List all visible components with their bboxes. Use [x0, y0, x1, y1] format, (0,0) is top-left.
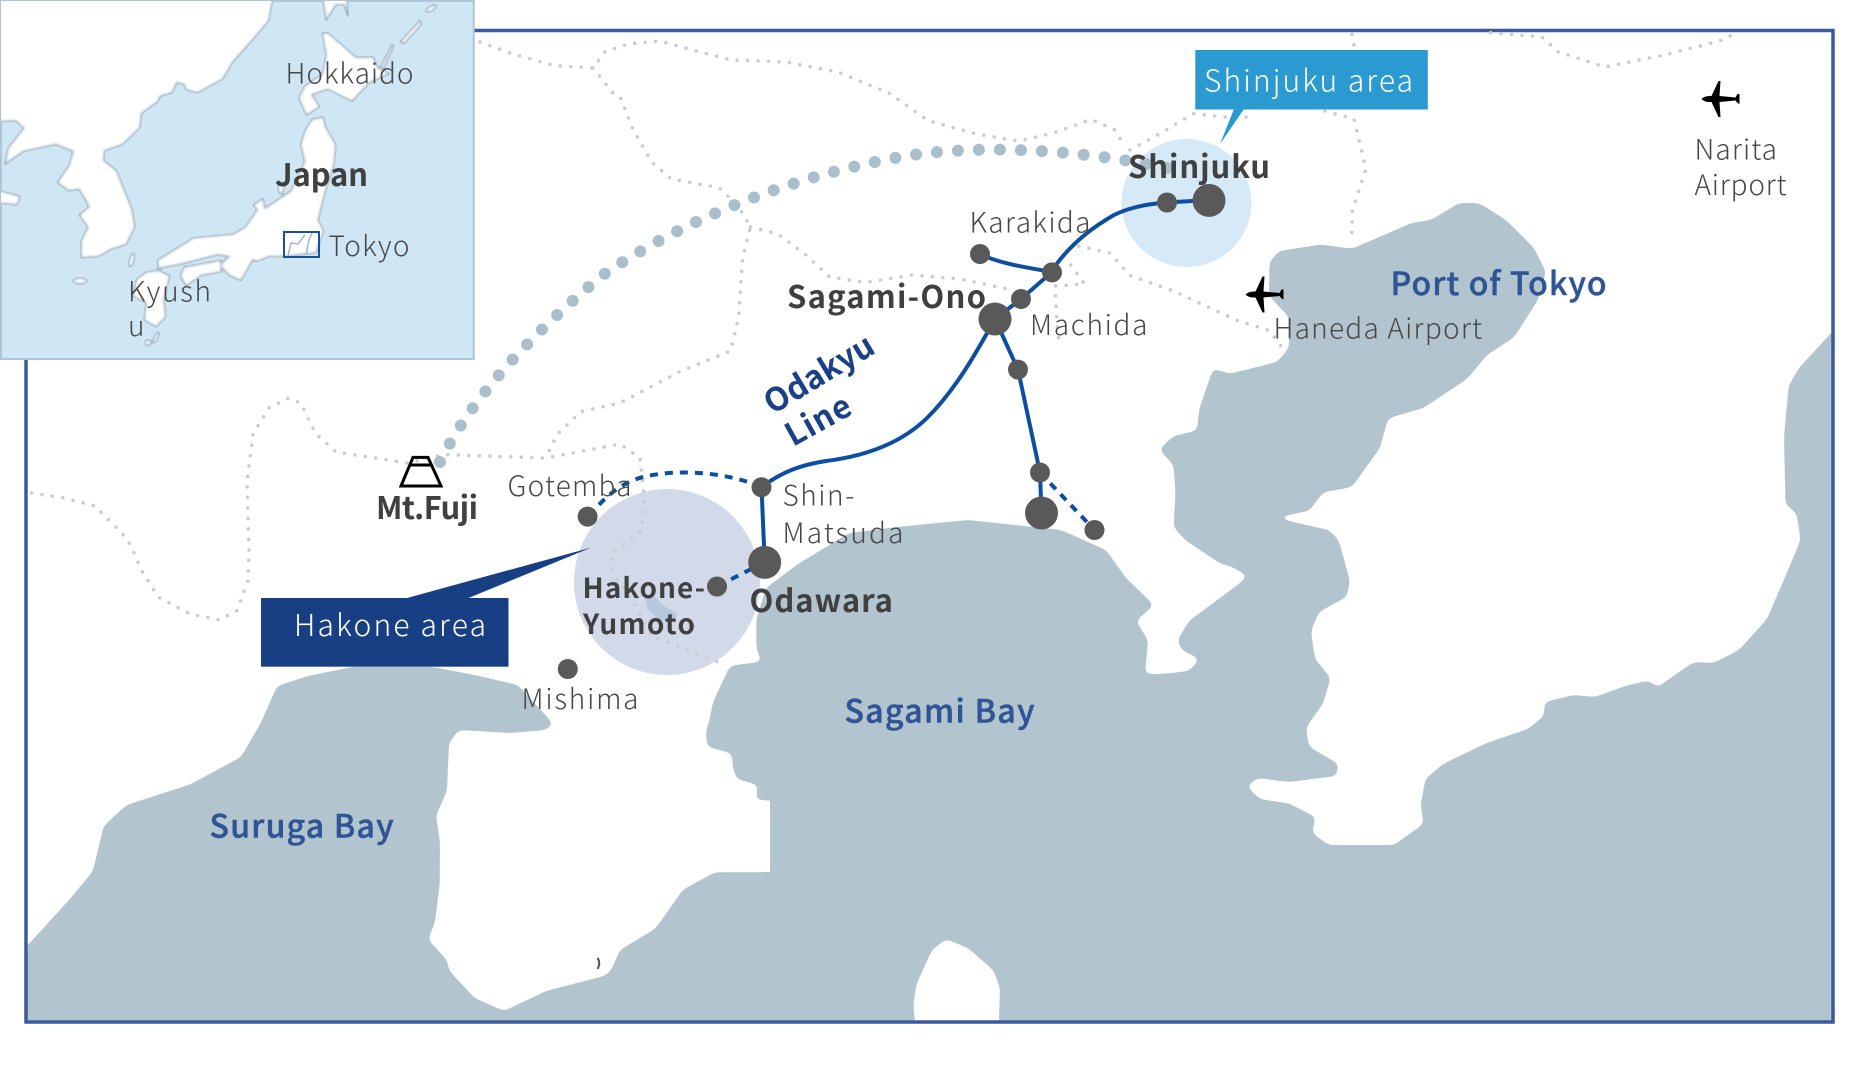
area circle: Hakone: [574, 489, 760, 675]
label: Kyushu: u: [128, 305, 144, 345]
icon: Mt.Fuji: [401, 457, 441, 486]
label: Odakyu Line: Line: [776, 382, 859, 456]
inset map of Japan: [0, 0, 474, 359]
label: Shin-Matsuda: Shin-: [782, 474, 854, 514]
area circle: Shinjuku: [1122, 139, 1252, 267]
prefecture boundaries: [32, 33, 1737, 663]
label: Narita Airport: [1694, 128, 1787, 204]
lake in Hakone: [645, 596, 676, 622]
label: Machida: Machida: [1030, 304, 1148, 344]
icon: plane Haneda: [1246, 276, 1284, 312]
label: Japan: Japan: [275, 150, 368, 195]
label: Hakone-Yumoto: Hakone-: [582, 567, 705, 607]
label: Hakone-Yumoto: [582, 567, 705, 643]
label: Kyushu: [128, 270, 211, 345]
label: Shin-Matsuda: [782, 474, 904, 552]
callout: Shinjuku area: [1195, 50, 1428, 144]
map: sea areas: [5, 203, 1849, 1060]
label: Shin-Matsuda: Matsuda: [782, 512, 904, 552]
callout: Shinjuku area: Shinjuku area: [1204, 56, 1413, 100]
small mark on peninsula: [598, 958, 599, 969]
inset land: Japan islands: [0, 0, 437, 346]
label: Shinjuku: Shinjuku: [1128, 142, 1270, 187]
land notch: [715, 800, 770, 872]
stations: [558, 184, 1226, 679]
label: Gotemba: Gotemba: [508, 465, 632, 505]
label: Mt.Fuji: Mt.Fuji: [376, 483, 478, 528]
callout: Hakone area: Hakone area: [294, 601, 486, 645]
label: Odawara: Odawara: [750, 576, 893, 621]
dotted route: Shinjuku to Mt.Fuji: [440, 150, 1185, 462]
label: Hokkaido: Hokkaido: [286, 53, 414, 93]
callout: Hakone area: [261, 548, 591, 667]
label: Hakone-Yumoto: Yumoto: [582, 603, 695, 643]
icon: plane Narita: [1702, 81, 1740, 117]
label: Narita Airport: Narita: [1694, 128, 1777, 168]
label: Kyushu: Kyush: [128, 270, 211, 310]
label: Narita Airport: Airport: [1694, 164, 1787, 204]
label: Sagami Bay: Sagami Bay: [844, 686, 1034, 732]
Odakyu railway lines: [588, 200, 1209, 586]
label: Tokyo: Tokyo: [328, 225, 410, 265]
label: Suruga Bay: Suruga Bay: [210, 802, 394, 848]
label: Haneda Airport: Haneda Airport: [1274, 308, 1482, 348]
label: Sagami-Ono: Sagami-Ono: [787, 272, 986, 317]
label: Port of Tokyo: Port of Tokyo: [1390, 259, 1606, 305]
label: Karakida: Karakida: [970, 202, 1090, 242]
label: Mishima: Mishima: [522, 678, 638, 718]
inset land: Asia mainland: [0, 0, 274, 258]
label: Odakyu Line: Odakyu: [754, 321, 882, 424]
inset: Tokyo box: [284, 232, 319, 257]
